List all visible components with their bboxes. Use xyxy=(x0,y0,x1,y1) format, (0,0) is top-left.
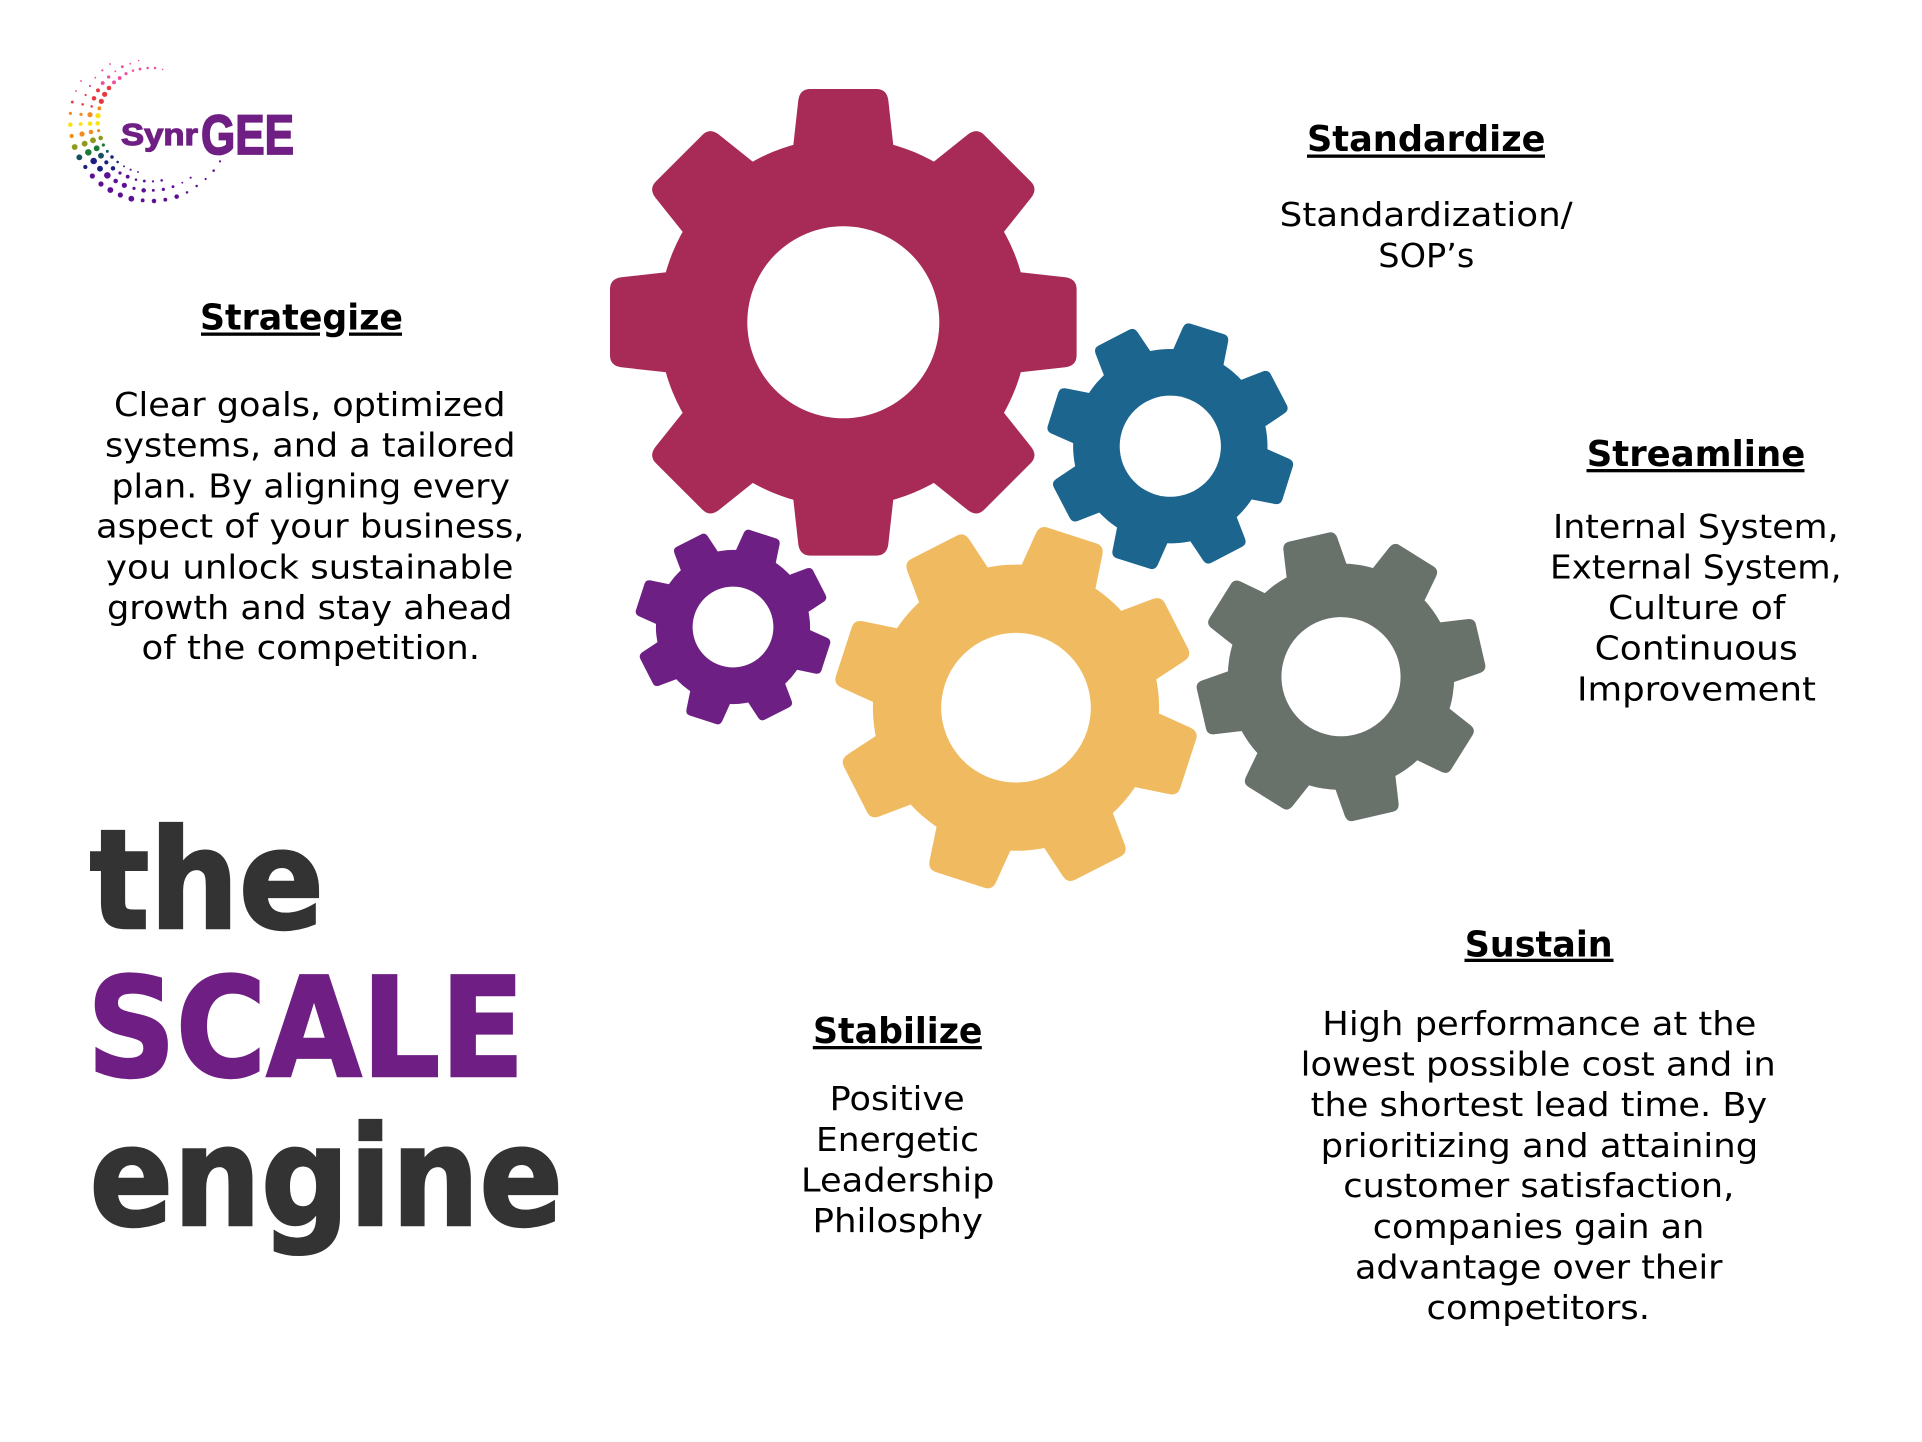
text block: Sustain description: companies gain an xyxy=(1373,1208,1704,1246)
text block: Strategize description: systems, and a tailored xyxy=(105,427,516,465)
title: the SCALE engine xyxy=(87,800,563,1258)
panel: Stabilize xyxy=(801,1011,994,1240)
text block: Strategize description: of the competition. xyxy=(142,629,480,667)
panel: Strategize xyxy=(96,298,524,667)
panel: Standardize xyxy=(1280,119,1573,275)
heading: Sustain: Sustain xyxy=(1465,924,1613,965)
text block: Sustain description: competitors. xyxy=(1426,1289,1650,1327)
text block: Sustain description: lowest possible cost and in xyxy=(1301,1046,1776,1084)
gear: purple xyxy=(610,504,856,750)
text block: Stabilize description: Positive xyxy=(830,1080,965,1118)
title: the SCALE engine: engine xyxy=(90,1097,563,1258)
text block: Strategize description xyxy=(96,386,524,667)
logo: SynrGEE xyxy=(68,60,294,203)
text block: Sustain description: the shortest lead time. By xyxy=(1311,1086,1767,1124)
text block: Strategize description: aspect of your business, xyxy=(96,508,524,546)
logo wordmark: Synr: Synr xyxy=(121,117,198,152)
text block: Sustain description: prioritizing and attaining xyxy=(1321,1127,1758,1165)
gear: yellow xyxy=(788,480,1244,936)
gear: grey xyxy=(1169,505,1513,848)
text block: Stabilize description: Leadership xyxy=(801,1162,994,1200)
panel: Streamline xyxy=(1550,434,1842,708)
text block: Stabilize description: Energetic xyxy=(816,1121,979,1159)
text block: Sustain description: advantage over their xyxy=(1355,1248,1723,1286)
text block: Strategize description: you unlock sustainable xyxy=(106,548,514,586)
text block: Standardize description: Standardization/ xyxy=(1280,196,1573,234)
panel: Sustain xyxy=(1301,924,1776,1327)
gear: blue xyxy=(1016,292,1325,600)
heading: Streamline: Streamline xyxy=(1587,434,1805,475)
heading: Standardize: Standardize xyxy=(1307,119,1546,160)
heading: Strategize: Strategize xyxy=(200,298,403,338)
icon: rainbow dot swirl xyxy=(68,60,221,203)
text block: Streamline description xyxy=(1550,508,1842,708)
text block: Stabilize description: Philosphy xyxy=(812,1202,983,1240)
text block: Strategize description: Clear goals, optimized xyxy=(114,386,506,424)
gear: crimson large xyxy=(610,89,1077,556)
text block: Sustain description xyxy=(1301,1005,1776,1327)
title: the SCALE engine: SCALE xyxy=(87,948,524,1109)
text block: Sustain description: customer satisfaction, xyxy=(1343,1167,1734,1205)
text block: Streamline description: Internal System, xyxy=(1553,508,1838,546)
heading: Stabilize: Stabilize xyxy=(813,1011,982,1052)
text block: Strategize description: plan. By aligning every xyxy=(112,467,510,505)
text block: Streamline description: Improvement xyxy=(1577,670,1816,708)
text block: Streamline description: External System, xyxy=(1550,549,1842,587)
title: the SCALE engine: the xyxy=(90,800,324,961)
text block: Streamline description: Continuous xyxy=(1595,630,1798,668)
text block: Strategize description: growth and stay ahead xyxy=(107,589,512,627)
text block: Streamline description: Culture of xyxy=(1608,589,1787,627)
text block: Standardize description: SOP’s xyxy=(1378,237,1474,275)
logo wordmark: GEE: GEE xyxy=(201,103,294,166)
text block: Standardize description xyxy=(1280,196,1573,275)
text block: Stabilize description xyxy=(801,1080,994,1240)
text block: Sustain description: High performance at the xyxy=(1322,1005,1756,1043)
